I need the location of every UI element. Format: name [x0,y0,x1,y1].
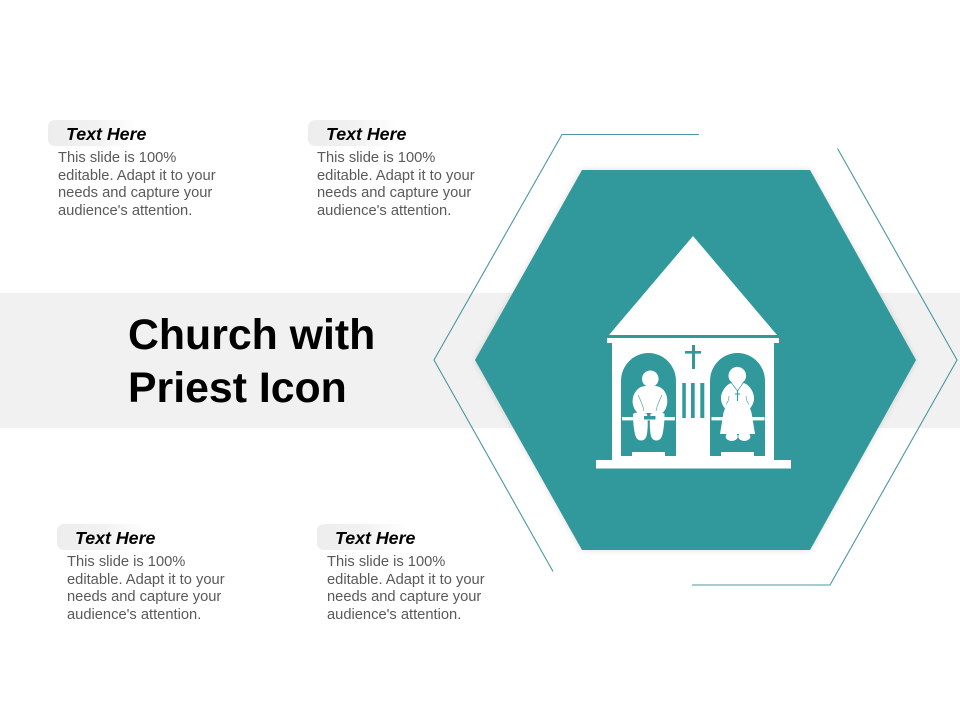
right niche [710,353,765,456]
title: Priest Icon [128,364,347,412]
church eave [607,338,779,343]
text block: bottom left: editable. Adapt it to your [67,572,225,588]
text block: top left: audience's attention. [58,203,192,219]
church roof [609,236,777,335]
icon: church with priest [596,236,791,468]
background band [0,293,960,428]
text block: top left: needs and capture your [58,185,212,201]
text block: top left: editable. Adapt it to your [58,168,216,184]
church base [596,460,791,468]
figure: seated person [633,370,667,440]
text block: top middle: This slide is 100% [317,150,435,166]
left bench [622,417,675,420]
text block: bottom left: This slide is 100% [67,554,185,570]
text block: bottom left: Text Here [75,528,155,548]
figure: seated priest [720,367,755,441]
text block: bottom left: needs and capture your [67,589,221,605]
text block: bottom middle: audience's attention. [327,607,461,623]
icon: cross [685,345,701,369]
text block: top middle: Text Here [326,124,406,144]
window bars [682,383,704,418]
text block: bottom middle: editable. Adapt it to your [327,572,485,588]
teal hexagon [475,170,916,550]
text block: bottom middle: needs and capture your [327,589,481,605]
text block: top left: Text Here [66,124,146,144]
title: Church with [128,311,375,359]
left niche [621,353,676,456]
text block: top middle: editable. Adapt it to your [317,168,475,184]
text block: top left [48,120,216,219]
church body [612,343,774,461]
right bench [712,417,764,420]
text block: bottom middle [317,524,485,623]
text block: bottom left [57,524,225,623]
hexagon outline: right [692,148,957,585]
title [128,311,375,412]
hexagon outline: left [434,134,699,572]
text block: top left: This slide is 100% [58,150,176,166]
text block: bottom middle: This slide is 100% [327,554,445,570]
text block: bottom middle: Text Here [335,528,415,548]
text block: bottom left: audience's attention. [67,607,201,623]
text block: top middle: needs and capture your [317,185,471,201]
hexagon shadow [475,170,916,550]
text block: top middle [308,120,475,219]
text block: top middle: audience's attention. [317,203,451,219]
